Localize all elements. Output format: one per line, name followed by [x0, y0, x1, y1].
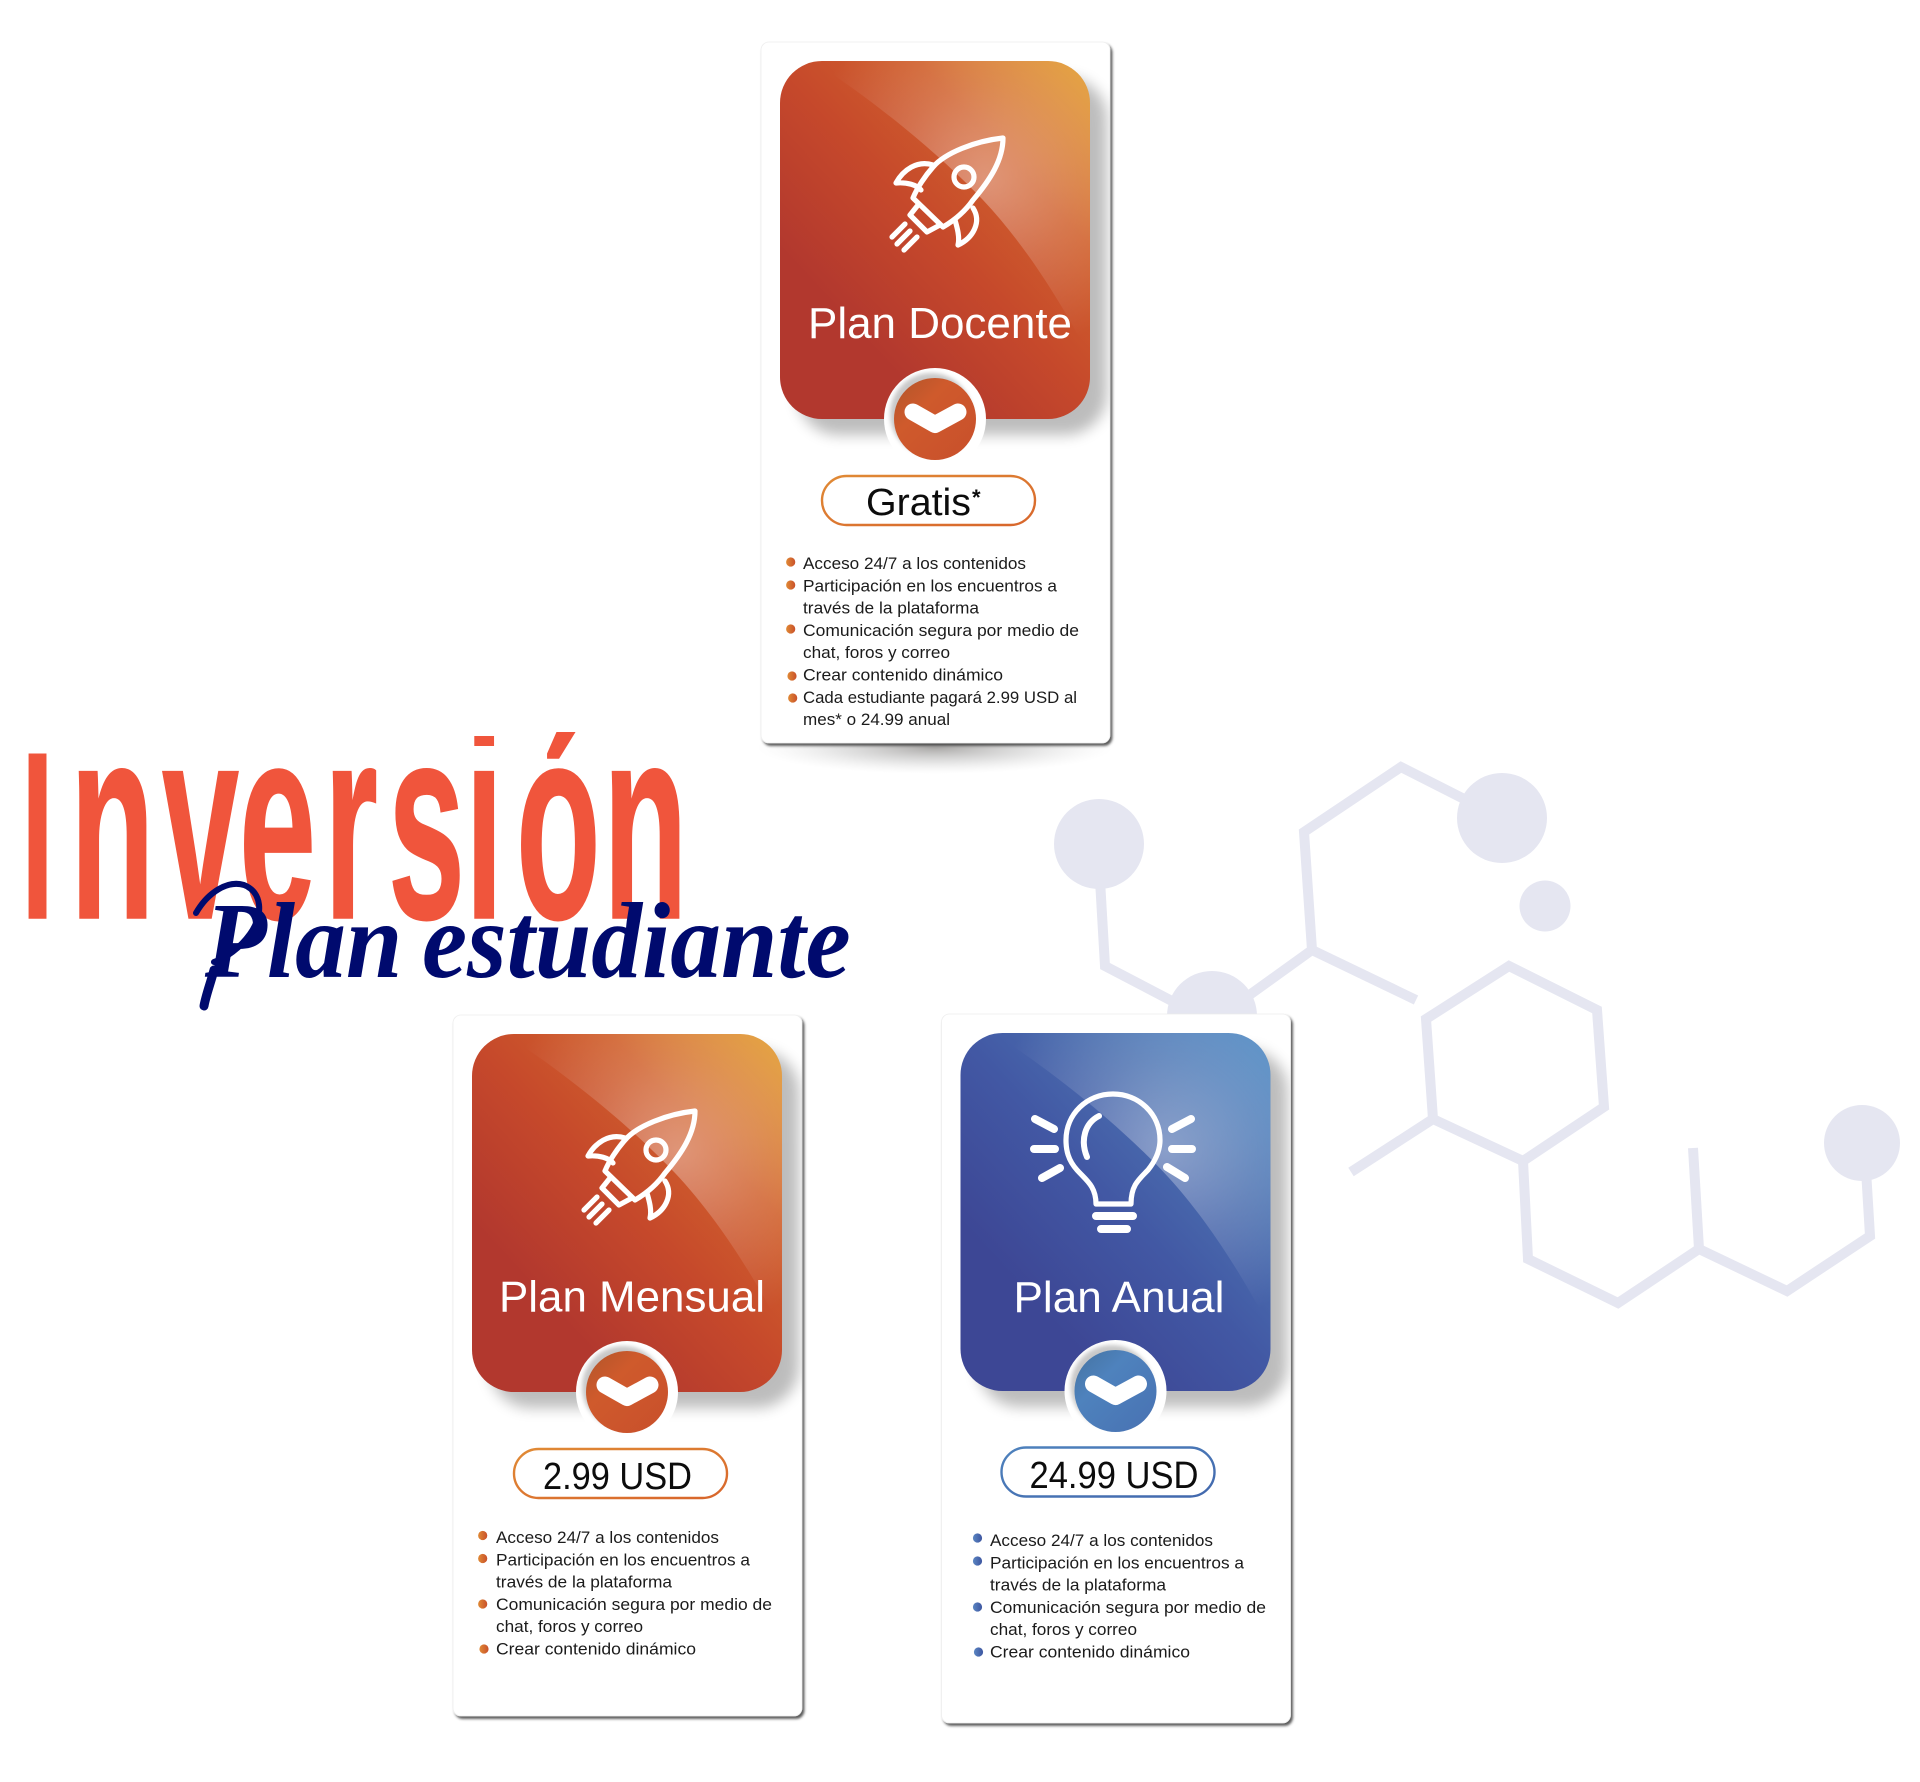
panel: Plan Anual [942, 1014, 1290, 1723]
icon: rocket [892, 138, 1003, 250]
feature list: Crear contenido dinámico [496, 1640, 696, 1658]
feature list: chat, foros y correo [496, 1617, 643, 1636]
heading: Inversión: nversión [70, 669, 688, 977]
subheading: Plan estudiante [196, 881, 851, 1006]
header tile [960, 1033, 1270, 1391]
header shadow [978, 1049, 1288, 1407]
price pill: 2.99 USD: 2.99 USD [543, 1456, 692, 1498]
feature list: Participación en los encuentros a [803, 576, 1058, 595]
feature list: Acceso 24/7 a los contenidos [990, 1531, 1213, 1550]
icon: light bulb [1034, 1094, 1192, 1229]
price pill: 24.99 USD: 24.99 USD [1030, 1455, 1198, 1497]
feature list [478, 1528, 772, 1658]
feature list: Participación en los encuentros a [990, 1553, 1245, 1572]
feature list: mes* o 24.99 anual [803, 710, 950, 729]
header tile [472, 1034, 782, 1392]
header tile [780, 61, 1090, 419]
background: molecule pattern [1054, 767, 1900, 1303]
feature list: Comunicación segura por medio de [990, 1598, 1266, 1617]
feature list: Acceso 24/7 a los contenidos [496, 1528, 719, 1547]
arrow badge [1064, 1340, 1166, 1442]
price pill: Gratis: Gratis [866, 482, 971, 524]
panel: Plan Mensual [453, 1015, 802, 1716]
price pill: Gratis [822, 476, 1035, 525]
panel: Plan Docente [761, 42, 1110, 743]
heading: Inversión [28, 732, 680, 922]
icon: rocket [584, 1111, 695, 1223]
card body [453, 1015, 802, 1716]
header shadow [797, 77, 1107, 435]
subheading: Plan estudiante: Plan [204, 881, 402, 1001]
heading: Inversión: I [21, 703, 54, 969]
feature list: Acceso 24/7 a los contenidos [803, 554, 1026, 573]
feature list: Participación en los encuentros a [496, 1550, 751, 1569]
feature list: través de la plataforma [496, 1573, 673, 1592]
feature list: Comunicación segura por medio de [496, 1595, 772, 1614]
feature list: chat, foros y correo [990, 1620, 1137, 1639]
arrow badge [576, 1341, 678, 1443]
card shadow: Plan Docente floor shadow [757, 722, 1113, 774]
feature list: través de la plataforma [803, 599, 980, 618]
price pill: Gratis: * [972, 485, 981, 510]
arrow badge [884, 368, 986, 470]
heading: Plan Mensual: Plan Mensual [499, 1272, 765, 1322]
feature list: Cada estudiante pagará 2.99 USD al [803, 688, 1077, 707]
header shadow [489, 1050, 799, 1408]
feature list [973, 1531, 1266, 1662]
heading: Plan Docente: Plan Docente [808, 299, 1072, 348]
card body [942, 1014, 1290, 1723]
heading: Plan Anual: Plan Anual [1014, 1273, 1224, 1322]
price pill: 2.99 USD [514, 1449, 727, 1498]
feature list: través de la plataforma [990, 1576, 1167, 1595]
feature list: Crear contenido dinámico [803, 666, 1003, 684]
subheading: Plan estudiante: estudiante [422, 881, 851, 1001]
card body [761, 42, 1110, 743]
feature list [786, 554, 1079, 729]
feature list: chat, foros y correo [803, 643, 950, 662]
feature list: Crear contenido dinámico [990, 1642, 1190, 1662]
feature list: Comunicación segura por medio de [803, 621, 1079, 640]
